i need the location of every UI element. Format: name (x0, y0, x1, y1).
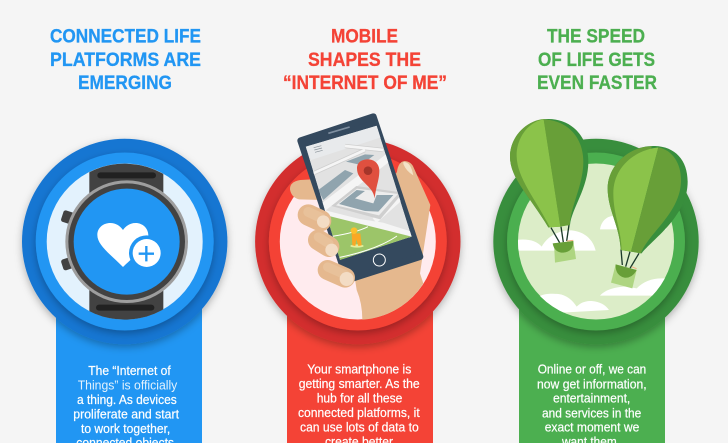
blue inner ring (36, 152, 214, 330)
blue outer ring (22, 139, 227, 344)
heading: connected life: CONNECTED LIFE (50, 26, 201, 48)
heading: mobile: “INTERNET OF ME” (283, 72, 447, 94)
illustration: hot air balloons and clouds (510, 119, 688, 313)
green disc (518, 164, 674, 320)
red inner ring (269, 152, 447, 330)
body text: connected life: proliferate and start (73, 406, 179, 421)
heading: connected life (50, 26, 201, 94)
body text: connected life: to work together, (81, 421, 170, 436)
body text: mobile: hub for all these (317, 390, 402, 406)
body text: mobile: getting smarter. As the (299, 376, 420, 391)
green outer ring (493, 139, 699, 344)
blue ribbon (56, 290, 202, 443)
heading: connected life: PLATFORMS ARE (50, 49, 201, 71)
heading: mobile: MOBILE (331, 26, 398, 48)
heading: speed of life: OF LIFE GETS (538, 49, 655, 71)
green ribbon (519, 290, 665, 443)
green inner ring (507, 152, 685, 330)
red ribbon (287, 290, 433, 443)
body text: speed of life: Online or off, we can (538, 362, 646, 376)
blue disc (47, 164, 203, 320)
red disc (280, 164, 436, 320)
panel: speed of life (493, 26, 699, 443)
body text: connected life: a thing. As devices (77, 392, 177, 407)
heading: connected life: EMERGING (78, 72, 172, 94)
body text: speed of life (537, 362, 647, 443)
heading: speed of life (537, 26, 657, 94)
body text: speed of life: now get information, (537, 376, 647, 391)
illustration: hand holding phone with map (290, 117, 430, 320)
body text: mobile: connected platforms, it (298, 405, 420, 420)
red outer ring (255, 139, 460, 344)
body text: connected life (73, 363, 179, 443)
body text: mobile: can use lots of data to (300, 420, 419, 435)
body text: connected life: The “Internet of (88, 363, 171, 378)
heading: mobile (283, 26, 447, 94)
body text: connected life: Things” is officially (78, 378, 178, 392)
body text: mobile (298, 362, 420, 443)
body text: mobile: Your smartphone is (307, 362, 412, 376)
heading: speed of life: THE SPEED (547, 26, 645, 48)
icon: smartwatch (60, 162, 188, 322)
panel: mobile (255, 26, 460, 443)
body text: speed of life: exact moment we (545, 420, 639, 435)
heading: speed of life: EVEN FASTER (537, 72, 657, 94)
heading: mobile: SHAPES THE (308, 49, 421, 71)
body text: speed of life: and services in the (542, 405, 641, 420)
body text: speed of life: entertainment, (553, 391, 630, 406)
panel: connected life (22, 26, 227, 443)
